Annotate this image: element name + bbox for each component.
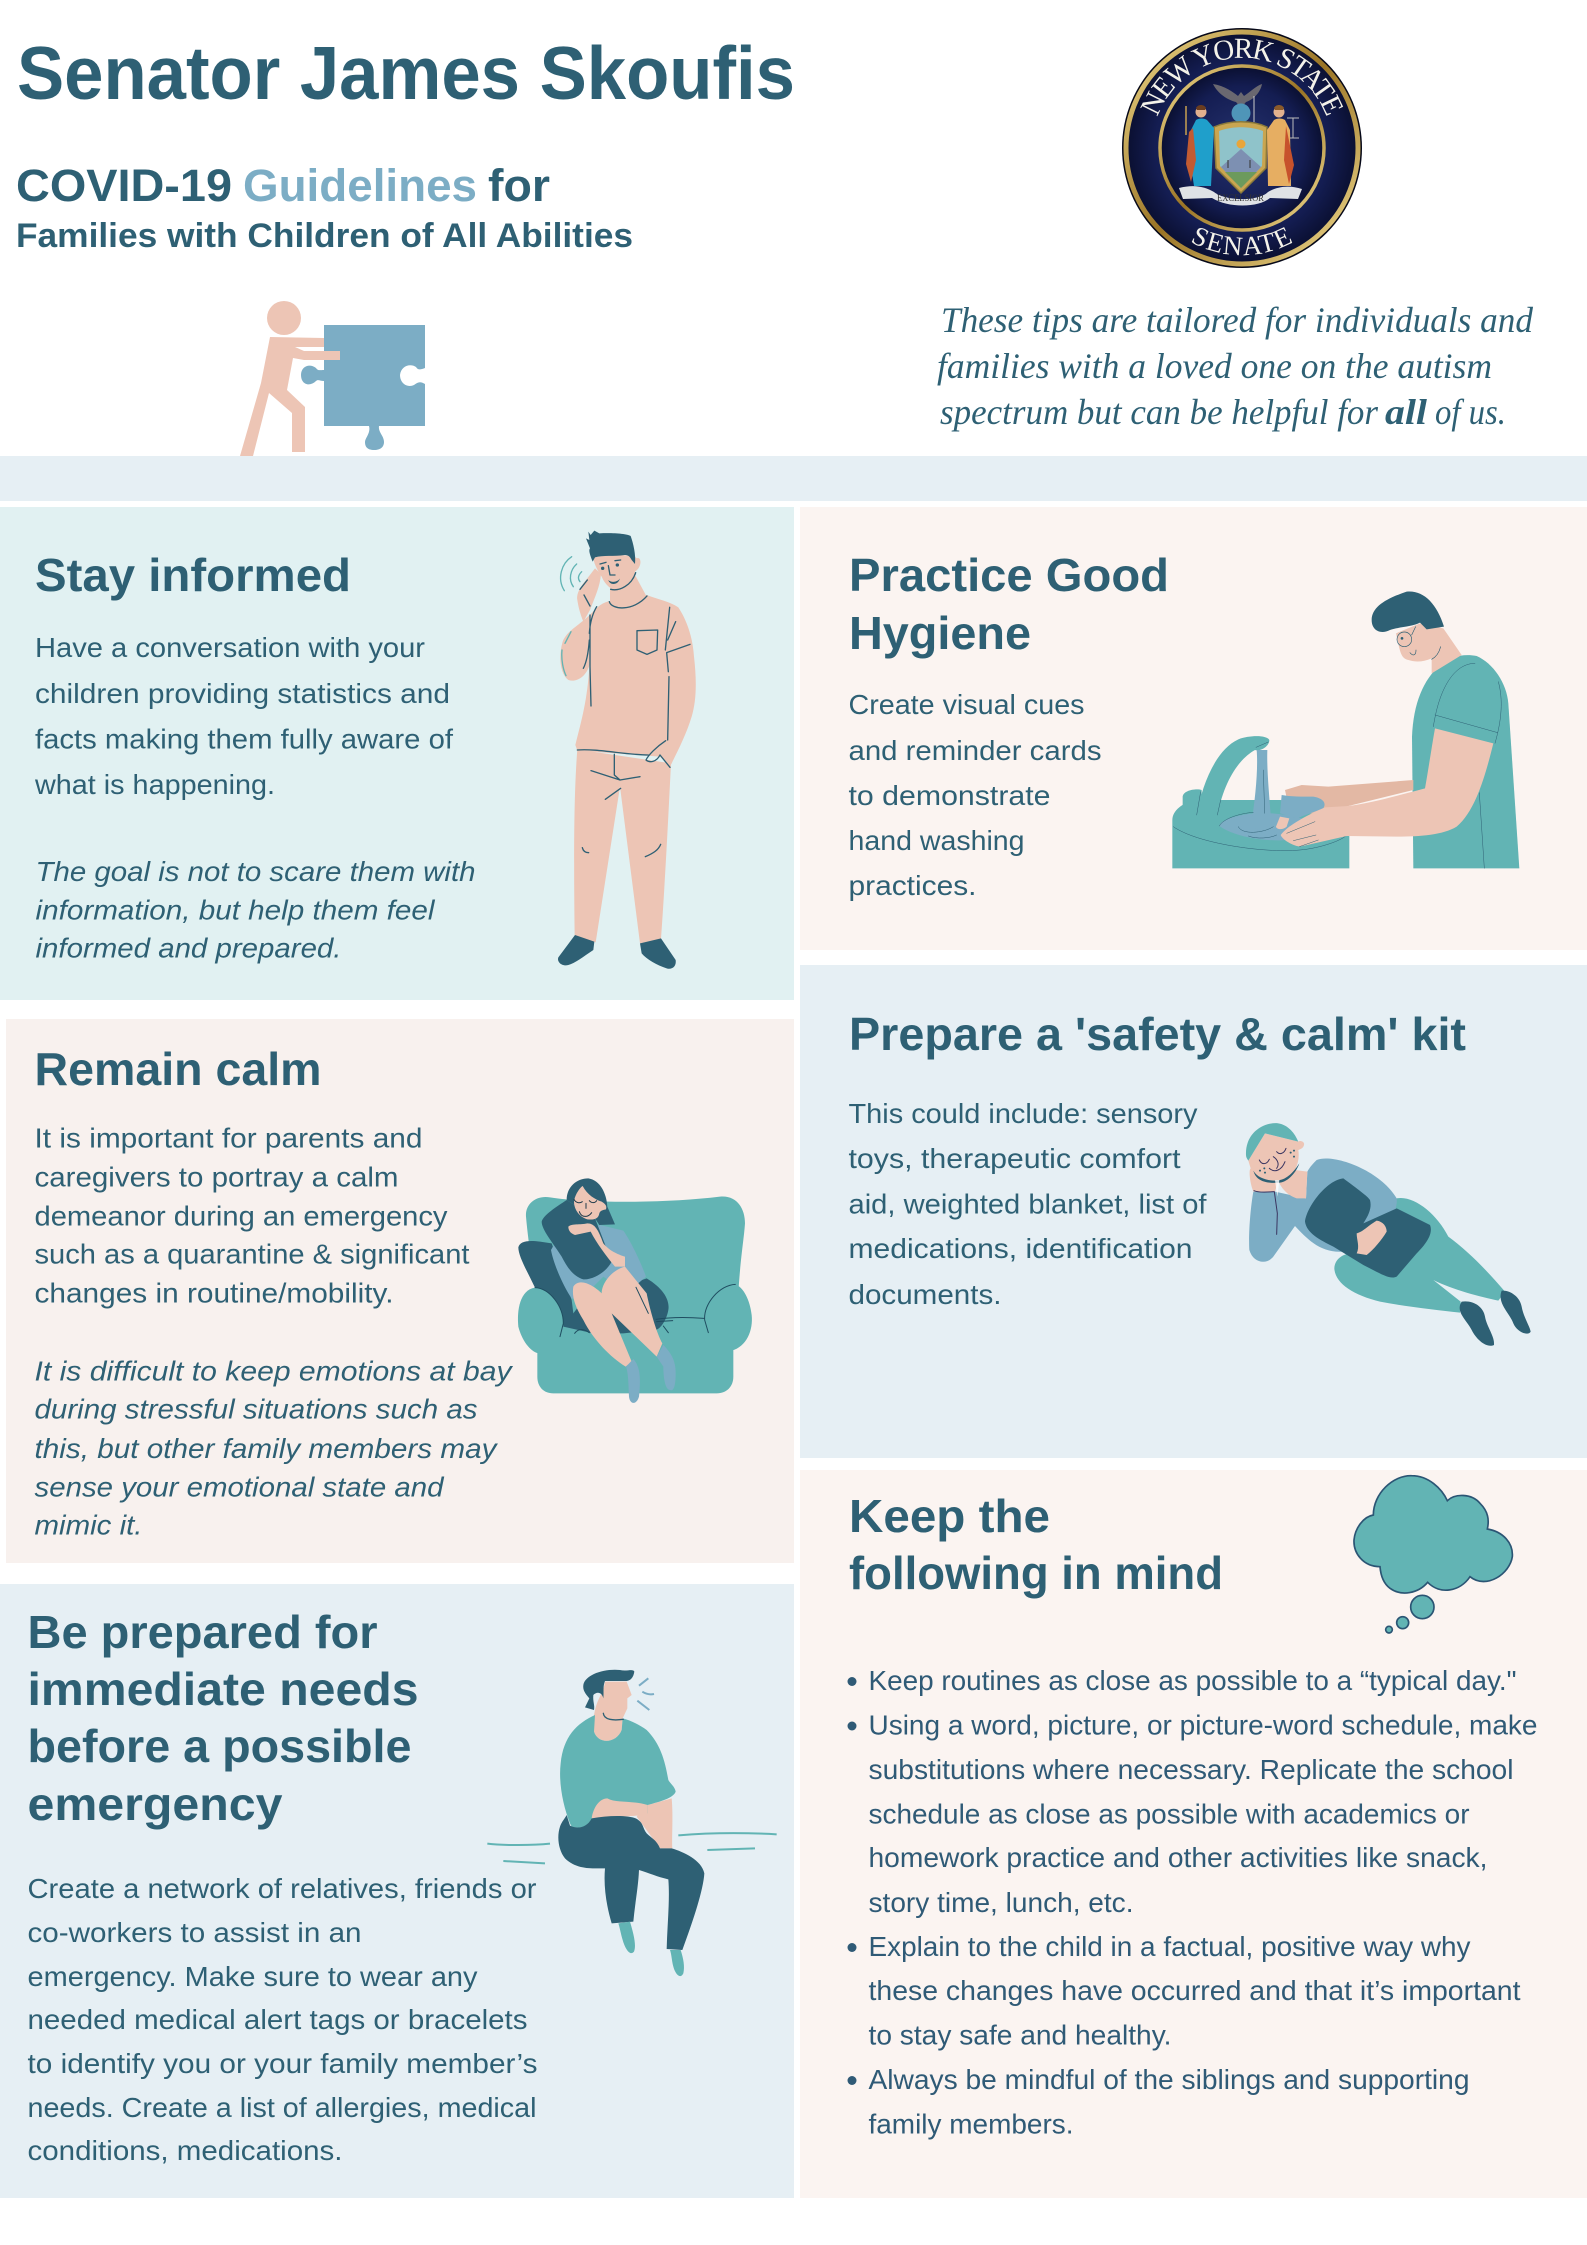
- icon: person pushing puzzle piece: [240, 301, 425, 456]
- panel: safety and calm kit: [800, 965, 1587, 1458]
- logo: New York State Senate seal: EXCELSIOR: [1217, 193, 1264, 203]
- body text: be prepared: conditions, medications.: [28, 2135, 342, 2166]
- intro note: families with a loved one on the autism: [937, 346, 1492, 386]
- subtitle line 1: COVID-19: [16, 160, 232, 211]
- subtitle line 1: Guidelines: [243, 160, 477, 211]
- illustration: man washing hands: [1172, 592, 1519, 868]
- body text: hygiene: practices.: [848, 870, 976, 901]
- bullet list: these changes have occurred and that it’s important: [868, 1975, 1521, 2006]
- bullet list: homework practice and other activities like snack,: [868, 1842, 1488, 1873]
- panel: practice good hygiene: [800, 507, 1587, 950]
- body text: be prepared: needed medical alert tags or bracelets: [28, 2004, 528, 2035]
- body text: stay informed: facts making them fully aware of: [35, 724, 453, 754]
- italic note: remain calm: It is difficult to keep emotions at bay: [34, 1356, 514, 1386]
- italic note: stay informed: informed and prepared.: [36, 932, 342, 964]
- italic note: remain calm: mimic it.: [34, 1510, 142, 1540]
- body text: hygiene: hand washing: [848, 825, 1024, 856]
- illustration: seated man: [487, 1670, 777, 1976]
- heading: keep in mind: following in mind: [849, 1547, 1223, 1599]
- body text: safety kit: [848, 1098, 1207, 1310]
- body text: be prepared: needs. Create a list of allergies, medical: [28, 2092, 536, 2123]
- panel: keep in mind: [800, 1470, 1587, 2198]
- heading: be prepared: before a possible: [28, 1720, 412, 1772]
- intro note: all: [1385, 392, 1427, 432]
- heading: keep in mind: [849, 1490, 1223, 1599]
- heading: keep in mind: Keep the: [849, 1490, 1050, 1542]
- bullet list: Using a word, picture, or picture-word schedule, make: [868, 1710, 1538, 1740]
- subtitle line 1: [16, 160, 550, 211]
- logo: New York State Senate seal: NEW YORK STATE: [1140, 38, 1344, 116]
- body text: safety kit: This could include: sensory: [848, 1098, 1198, 1129]
- intro note: of us.: [1435, 392, 1506, 432]
- subtitle line 2: Families with Children of All Abilities: [16, 217, 633, 255]
- intro note: These tips are tailored for individuals and: [941, 300, 1534, 340]
- illustration: woman in armchair: [518, 1178, 752, 1403]
- heading: be prepared: immediate needs: [28, 1663, 419, 1715]
- heading: be prepared: [28, 1606, 419, 1830]
- banner strip: [0, 456, 1587, 501]
- heading: remain calm: Remain calm: [34, 1043, 322, 1095]
- body text: safety kit: medications, identification: [848, 1233, 1192, 1264]
- body text: remain calm: [34, 1122, 470, 1308]
- body text: be prepared: emergency. Make sure to wear any: [28, 1961, 478, 1992]
- heading: stay informed: Stay informed: [35, 549, 351, 601]
- italic note: remain calm: sense your emotional state and: [34, 1472, 445, 1502]
- body text: remain calm: such as a quarantine & significant: [34, 1238, 470, 1270]
- bullet list: family members.: [868, 2108, 1074, 2140]
- italic note: stay informed: [36, 856, 476, 964]
- bullet list: [848, 1665, 1538, 2140]
- bullet list: Explain to the child in a factual, positive way why: [868, 1931, 1471, 1962]
- body text: hygiene: Create visual cues: [848, 689, 1084, 720]
- panel: stay informed: [0, 507, 794, 1000]
- body text: hygiene: [848, 689, 1102, 901]
- body text: remain calm: changes in routine/mobility.: [34, 1278, 393, 1308]
- subtitle line 1: for: [488, 160, 550, 211]
- title: Senator James Skoufis: [17, 31, 795, 115]
- icon: thought cloud: [1354, 1476, 1512, 1633]
- body text: be prepared: [28, 1873, 538, 2166]
- bullet list: Keep routines as close as possible to a “typical day.": [868, 1665, 1516, 1696]
- body text: stay informed: [34, 632, 453, 800]
- bullet list: story time, lunch, etc.: [868, 1887, 1134, 1918]
- body text: remain calm: caregivers to portray a calm: [34, 1162, 398, 1192]
- intro note: spectrum but can be helpful for: [940, 392, 1379, 432]
- body text: hygiene: and reminder cards: [848, 735, 1102, 766]
- panel: be prepared: [0, 1584, 794, 2198]
- heading: safety and calm kit: Prepare a 'safety & calm' kit: [849, 1008, 1466, 1060]
- body text: stay informed: children providing statistics and: [35, 678, 450, 709]
- body text: stay informed: Have a conversation with your: [35, 632, 425, 663]
- body text: remain calm: It is important for parents and: [34, 1122, 422, 1154]
- body text: be prepared: to identify you or your family member’s: [28, 2048, 538, 2079]
- italic note: remain calm: [34, 1356, 514, 1540]
- heading: practice good hygiene: Practice Good: [849, 549, 1169, 601]
- body text: be prepared: Create a network of relatives, friends or: [28, 1873, 536, 1904]
- italic note: remain calm: during stressful situations such as: [34, 1394, 478, 1424]
- bullet list: to stay safe and healthy.: [868, 2020, 1172, 2050]
- illustration: resting man with pillow: [1246, 1123, 1531, 1346]
- heading: practice good hygiene: [849, 549, 1169, 659]
- bullet list: Always be mindful of the siblings and supporting: [868, 2064, 1470, 2095]
- panel: remain calm: [6, 1019, 794, 1563]
- illustration: man on phone: [558, 531, 696, 969]
- body text: safety kit: toys, therapeutic comfort: [848, 1143, 1181, 1174]
- italic note: remain calm: this, but other family members may: [34, 1433, 499, 1464]
- italic note: stay informed: information, but help them feel: [36, 894, 435, 926]
- heading: be prepared: Be prepared for: [28, 1606, 378, 1658]
- logo: New York State Senate seal: SENATE: [1192, 227, 1292, 256]
- intro note: [937, 300, 1534, 432]
- body text: be prepared: co-workers to assist in an: [28, 1917, 362, 1948]
- bullet list: substitutions where necessary. Replicate the school: [868, 1754, 1514, 1785]
- bullet list: schedule as close as possible with academics or: [868, 1798, 1470, 1830]
- italic note: stay informed: The goal is not to scare them with: [36, 856, 476, 887]
- body text: stay informed: what is happening.: [34, 769, 275, 800]
- heading: be prepared: emergency: [28, 1778, 283, 1830]
- body text: safety kit: documents.: [848, 1279, 1002, 1310]
- body text: hygiene: to demonstrate: [848, 780, 1050, 811]
- body text: remain calm: demeanor during an emergency: [34, 1200, 448, 1232]
- logo: New York State Senate seal: [1122, 28, 1362, 268]
- body text: safety kit: aid, weighted blanket, list of: [848, 1188, 1207, 1220]
- heading: practice good hygiene: Hygiene: [849, 607, 1031, 659]
